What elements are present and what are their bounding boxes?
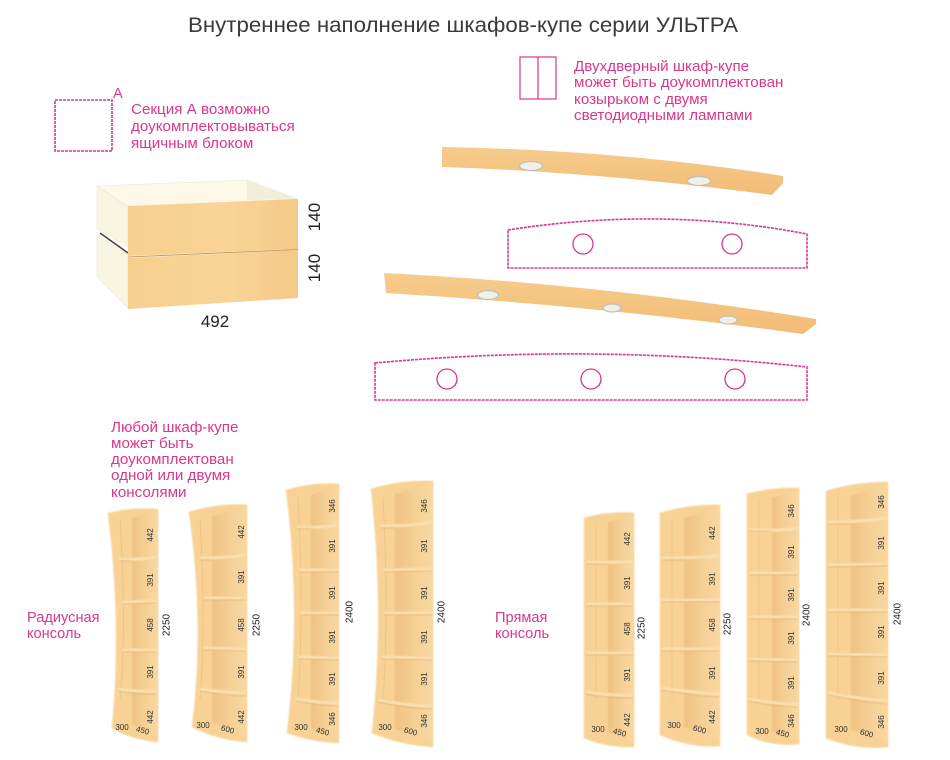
straight console 300x600, 2250: 458 (708, 618, 717, 632)
canopy with three lamps (384, 273, 816, 334)
straight console 300x600, 2400: 346 (877, 495, 886, 509)
drawer front upper (128, 199, 298, 256)
straight console 300x450, 2250: 300 (591, 725, 605, 734)
straight console 300x450, 2250: 442 (623, 713, 632, 727)
radial console 300x600, 2400: 600 (403, 726, 419, 738)
radial console 300x450, 2400: 391 (328, 539, 337, 553)
dimension: 492: 492 (201, 312, 229, 331)
radial console 300x450, 2250: 442 (146, 528, 155, 542)
straight console 300x600, 2250: 442 (708, 710, 717, 724)
straight console 300x450, 2250 (584, 513, 648, 747)
radial console 300x450, 2250: 2250 (162, 613, 172, 636)
radial console 300x600, 2250 (189, 505, 262, 742)
straight console 300x600, 2250 (660, 505, 734, 746)
text: two-door note: Двухдверный шкаф-купе (574, 58, 749, 75)
title: Внутреннее наполнение шкафов-купе серии УЛЬТРА (188, 13, 739, 37)
straight console 300x600, 2400: 2400 (892, 602, 904, 625)
text: console note: консолями (111, 484, 187, 501)
text: two-door note: козырьком с двумя (574, 91, 708, 108)
straight console 300x600, 2400: 391 (877, 581, 886, 595)
straight console 300x450, 2400: 391 (787, 588, 796, 602)
straight console 300x450, 2400: 391 (787, 631, 796, 645)
radial console 300x600, 2250: 391 (237, 570, 246, 584)
straight console 300x600, 2250: 391 (708, 572, 717, 586)
drawer left side lower (97, 235, 128, 308)
canopy body (442, 147, 783, 195)
radial console 300x450, 2250: 458 (146, 618, 155, 632)
radial console 300x450, 2400: 346 (328, 499, 337, 513)
radial console 300x450, 2250: 442 (146, 710, 155, 724)
radial console 300x450, 2250: 300 (115, 723, 129, 732)
radial console 300x450, 2400: 450 (315, 726, 331, 738)
text: console note: одной или двумя (111, 467, 230, 484)
radial console 300x600, 2400 (371, 481, 448, 747)
drawer gap (100, 233, 128, 253)
lamp 1 (520, 162, 542, 170)
radial console 300x450, 2250 (108, 508, 172, 742)
radial console 300x600, 2400: 300 (378, 723, 392, 732)
radial console 300x600, 2250: 442 (237, 710, 246, 724)
radial console 300x600, 2400: 2400 (436, 600, 448, 623)
straight console 300x450, 2400 (747, 488, 812, 745)
dimension: 140 upper: 140 (305, 203, 324, 231)
straight console 300x600, 2250: 391 (708, 666, 717, 680)
straight console 300x450, 2400: 2400 (802, 603, 812, 626)
panel: two-door canopy note (520, 57, 783, 124)
drawer front joint (128, 250, 298, 257)
canopy outline, three lamps (375, 354, 807, 400)
label: straight console: консоль (495, 626, 549, 642)
straight console 300x450, 2250: 391 (623, 668, 632, 682)
radial console 300x450, 2400: 300 (294, 723, 308, 732)
straight console 300x600, 2400 (826, 482, 904, 748)
text: section A note: ящичным блоком (131, 135, 253, 152)
straight console 300x450, 2400: 391 (787, 676, 796, 690)
straight console 300x600, 2250: 2250 (722, 612, 734, 635)
text: console note: доукомплектован (111, 451, 234, 468)
canopy outline, two lamps (508, 219, 807, 268)
radial console 300x600, 2250: 458 (237, 618, 246, 632)
radial console 300x450, 2400: 346 (328, 712, 337, 726)
straight console 300x600, 2400: 600 (859, 728, 875, 740)
straight console 300x450, 2250: 442 (623, 532, 632, 546)
radial console 300x600, 2400: 346 (420, 499, 429, 513)
straight console 300x600, 2400: 391 (877, 671, 886, 685)
straight console 300x600, 2400: 300 (834, 725, 848, 734)
straight console 300x450, 2400: 450 (775, 728, 791, 740)
text: two-door note: светодиодными лампами (574, 107, 752, 124)
radial console 300x450, 2400: 391 (328, 630, 337, 644)
label: radial console: Радиусная (27, 610, 100, 626)
drawer left side upper (97, 186, 128, 247)
radial console 300x600, 2250: 2250 (252, 613, 262, 636)
canopy body (384, 273, 816, 334)
radial console 300x600, 2400: 391 (420, 630, 429, 644)
text: section A note: Секция А возможно (131, 101, 270, 118)
text: console note: может быть (111, 435, 194, 452)
radial console 300x600, 2250: 600 (220, 724, 236, 736)
lamp 3 (719, 316, 737, 324)
straight console 300x600, 2250: 300 (667, 721, 681, 730)
text: two-door note: может быть доукомплектован (574, 74, 783, 91)
straight console 300x450, 2250: 458 (623, 622, 632, 636)
radial console 300x450, 2400 (286, 484, 356, 743)
radial console 300x600, 2400: 391 (420, 672, 429, 686)
drawer right inner side (247, 180, 298, 200)
straight console 300x450, 2250: 450 (612, 727, 628, 739)
radial console 300x450, 2250: 450 (135, 725, 151, 737)
radial console 300x600, 2400: 346 (420, 714, 429, 728)
lamp 2 (603, 304, 621, 312)
radial console 300x450, 2250: 391 (146, 573, 155, 587)
straight console 300x450, 2400: 346 (787, 714, 796, 728)
text: console note: Любой шкаф-купе (111, 419, 238, 436)
straight console 300x600, 2400: 391 (877, 625, 886, 639)
canopy with two lamps (442, 147, 783, 195)
radial console 300x450, 2250: 391 (146, 665, 155, 679)
lamp 1 (478, 290, 498, 300)
drawer block illustration (97, 180, 324, 331)
label: straight console: Прямая (495, 610, 547, 626)
straight console 300x600, 2250: 442 (708, 526, 717, 540)
section A letter: А (113, 86, 123, 102)
straight console 300x450, 2400: 300 (755, 727, 769, 736)
straight console 300x600, 2400: 346 (877, 715, 886, 729)
radial console 300x450, 2400: 2400 (344, 600, 356, 623)
straight console 300x450, 2400: 346 (787, 504, 796, 518)
dimension: 140 lower: 140 (305, 254, 324, 282)
icon: two-door wardrobe (520, 57, 556, 99)
icon: section A dashed square (55, 100, 112, 151)
straight console 300x600, 2400: 391 (877, 536, 886, 550)
radial console 300x450, 2400: 391 (328, 672, 337, 686)
drawer front lower (128, 250, 298, 309)
radial console 300x600, 2250: 391 (237, 665, 246, 679)
straight console 300x450, 2400: 391 (787, 545, 796, 559)
straight console 300x450, 2250: 2250 (636, 616, 648, 639)
text: section A note: доукомплектовываться (131, 118, 295, 135)
radial console 300x600, 2250: 300 (196, 721, 210, 730)
radial console 300x600, 2400: 391 (420, 539, 429, 553)
panel: section A note (55, 86, 295, 152)
straight console 300x450, 2250: 391 (623, 576, 632, 590)
radial console 300x450, 2400: 391 (328, 586, 337, 600)
label: radial console: консоль (27, 626, 81, 642)
lamp 2 (688, 176, 710, 186)
drawer interior (97, 180, 298, 207)
radial console 300x600, 2400: 391 (420, 586, 429, 600)
radial console 300x600, 2250: 442 (237, 525, 246, 539)
straight console 300x600, 2250: 600 (692, 724, 708, 736)
